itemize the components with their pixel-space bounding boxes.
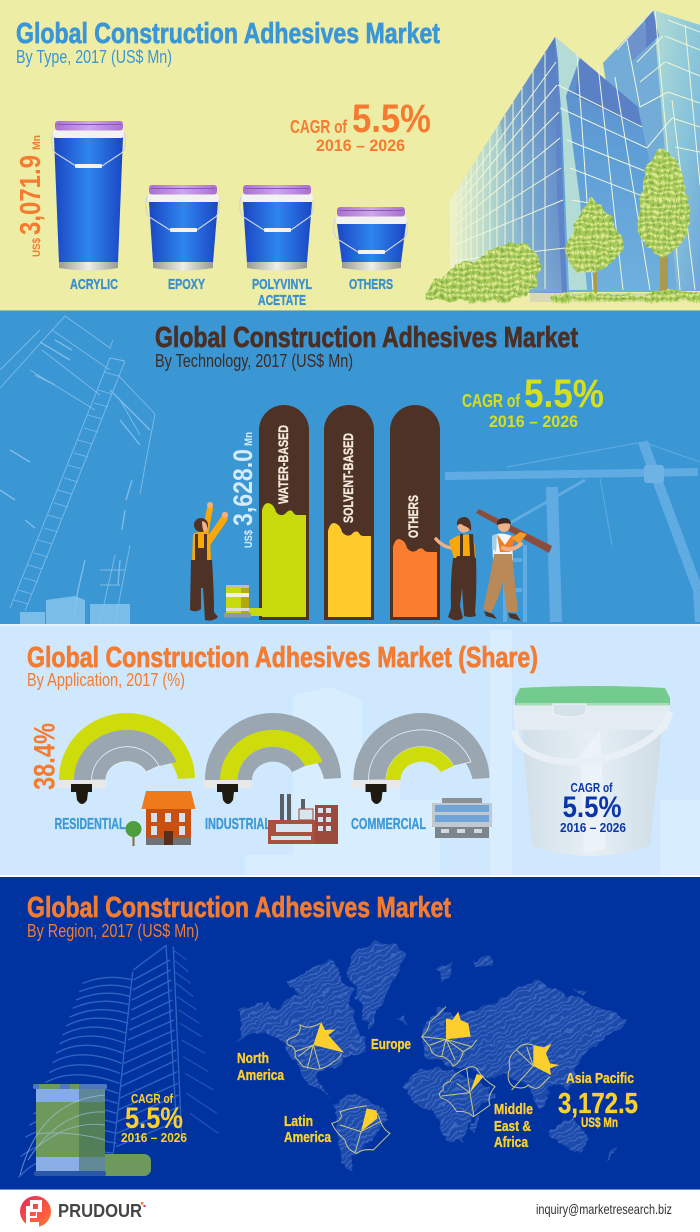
map: continents xyxy=(233,942,630,1173)
background: faint skyline xyxy=(245,630,700,875)
worker: left xyxy=(190,502,228,621)
bar: solvent-based xyxy=(324,405,374,620)
bar: solvent-based: SOLVENT-BASED xyxy=(340,433,356,523)
panel: by application xyxy=(0,624,700,875)
bucket: acrylic xyxy=(52,121,125,270)
title: by region: Global Construction Adhesives Market xyxy=(27,892,451,924)
cagr callout: by type: 2016 – 2026 xyxy=(316,136,405,155)
splat: north america xyxy=(287,1022,344,1069)
icon: house and tree xyxy=(126,791,196,846)
bucket labels: POLYVINYL xyxy=(252,277,312,293)
bar: water-based: WATER-BASED xyxy=(275,425,291,504)
value: acrylic rotated: US$ xyxy=(31,238,43,257)
bar: water-based xyxy=(259,405,309,620)
labels: application: COMMERCIAL xyxy=(351,816,426,833)
background: tower sketch xyxy=(0,316,155,622)
panel: by region xyxy=(0,877,700,1190)
bar: others: OTHERS xyxy=(405,495,421,538)
title: by type: Global Construction Adhesives Market xyxy=(16,18,440,50)
cagr callout: by region: CAGR of xyxy=(131,1091,174,1106)
splat: europe xyxy=(422,1007,477,1066)
bucket labels: ACETATE xyxy=(258,293,306,309)
cagr callout: by technology: 2016 – 2026 xyxy=(489,412,578,431)
bushes and trees xyxy=(424,150,700,302)
worker: middle xyxy=(436,517,476,620)
value: water-based rotated: Mn xyxy=(243,432,255,446)
bucket: others xyxy=(334,207,407,270)
icon: logo accent dots xyxy=(141,1202,146,1207)
icon: green paint can xyxy=(20,1084,151,1176)
worker: carrying plank xyxy=(476,509,552,621)
faint tower xyxy=(19,945,218,1177)
footer xyxy=(0,1190,700,1232)
labels: application: INDUSTRIAL xyxy=(205,816,271,833)
cagr callout: by type xyxy=(290,97,431,155)
world map xyxy=(233,942,630,1173)
background: crane cab xyxy=(644,465,664,483)
bucket labels: OTHERS xyxy=(349,277,393,293)
value: water-based rotated: US$ xyxy=(243,530,255,548)
splat: asia pacific xyxy=(508,1043,559,1090)
icon: prudour logo xyxy=(20,1196,51,1227)
splat: latin america xyxy=(332,1106,390,1153)
region labels: 3,172.5 xyxy=(558,1088,638,1120)
region labels: Middle xyxy=(494,1101,533,1118)
value: acrylic rotated: Mn xyxy=(31,135,43,150)
cagr callout: pail: CAGR of xyxy=(570,780,613,795)
icon: commercial building xyxy=(432,798,492,838)
background: podium xyxy=(20,596,130,624)
subtitle: by type: By Type, 2017 (US$ Mn) xyxy=(16,47,172,67)
title: by technology: Global Construction Adhesives Market xyxy=(155,322,578,354)
cagr callout: by region xyxy=(121,1091,187,1145)
value: acrylic rotated: 3,071.9 xyxy=(15,155,47,235)
region labels: North xyxy=(237,1050,269,1067)
background: cranes and site xyxy=(445,442,700,622)
cagr callout: pail: 5.5% xyxy=(562,791,622,824)
region labels: Latin xyxy=(284,1113,313,1130)
cagr callout: by technology: CAGR of xyxy=(462,391,521,411)
bucket labels xyxy=(70,277,393,309)
value: water-based rotated: 3,628.0 xyxy=(228,449,258,526)
icon: factory xyxy=(268,794,338,844)
arc chart: commercial xyxy=(352,713,490,804)
region labels: Europe xyxy=(371,1036,411,1053)
region labels: America xyxy=(284,1129,332,1146)
labels: application: RESIDENTIAL xyxy=(54,816,126,833)
cagr callout: by region: 2016 – 2026 xyxy=(121,1130,187,1145)
title: by application: Global Construction Adhesives Market (Share) xyxy=(27,642,538,674)
bucket: white pail with cagr xyxy=(513,686,670,856)
bucket: epoxy xyxy=(146,185,219,270)
bucket labels: ACRYLIC xyxy=(70,277,118,293)
bar: others xyxy=(390,405,440,620)
cagr callout: by region: 5.5% xyxy=(125,1102,183,1135)
cagr callout: by type: 5.5% xyxy=(352,97,431,141)
bucket labels: EPOXY xyxy=(168,277,205,293)
region labels xyxy=(237,1036,638,1151)
value: 38.4% rotated: 38.4% xyxy=(28,723,62,790)
labels: application xyxy=(54,816,426,833)
splat: middle east and africa xyxy=(440,1067,495,1117)
arc chart: industrial xyxy=(203,713,341,804)
panel: by type xyxy=(0,0,700,311)
cagr callout: by type: CAGR of xyxy=(290,117,348,137)
region labels: East & xyxy=(494,1118,531,1135)
region labels: America xyxy=(237,1067,285,1084)
cagr callout: by technology xyxy=(462,372,604,431)
glass office building xyxy=(450,10,700,293)
bucket: polyvinyl acetate xyxy=(240,185,313,270)
subtitle: by technology: By Technology, 2017 (US$ Mn) xyxy=(155,351,353,371)
cagr callout: by technology: 5.5% xyxy=(524,372,604,416)
region labels: US$ Mn xyxy=(581,1114,618,1130)
cagr callout: pail: 2016 – 2026 xyxy=(560,820,626,835)
region labels: Asia Pacific xyxy=(566,1070,634,1087)
icon: paint can xyxy=(224,585,262,618)
arc chart: residential xyxy=(57,713,195,804)
subtitle: by region: By Region, 2017 (US$ Mn) xyxy=(27,921,199,941)
panel: by technology xyxy=(0,311,700,624)
brand name: PRUDOUR xyxy=(58,1201,142,1221)
cagr callout: pail xyxy=(560,780,626,835)
region labels: Africa xyxy=(494,1134,529,1151)
subtitle: by application: By Application, 2017 (%) xyxy=(27,670,185,690)
